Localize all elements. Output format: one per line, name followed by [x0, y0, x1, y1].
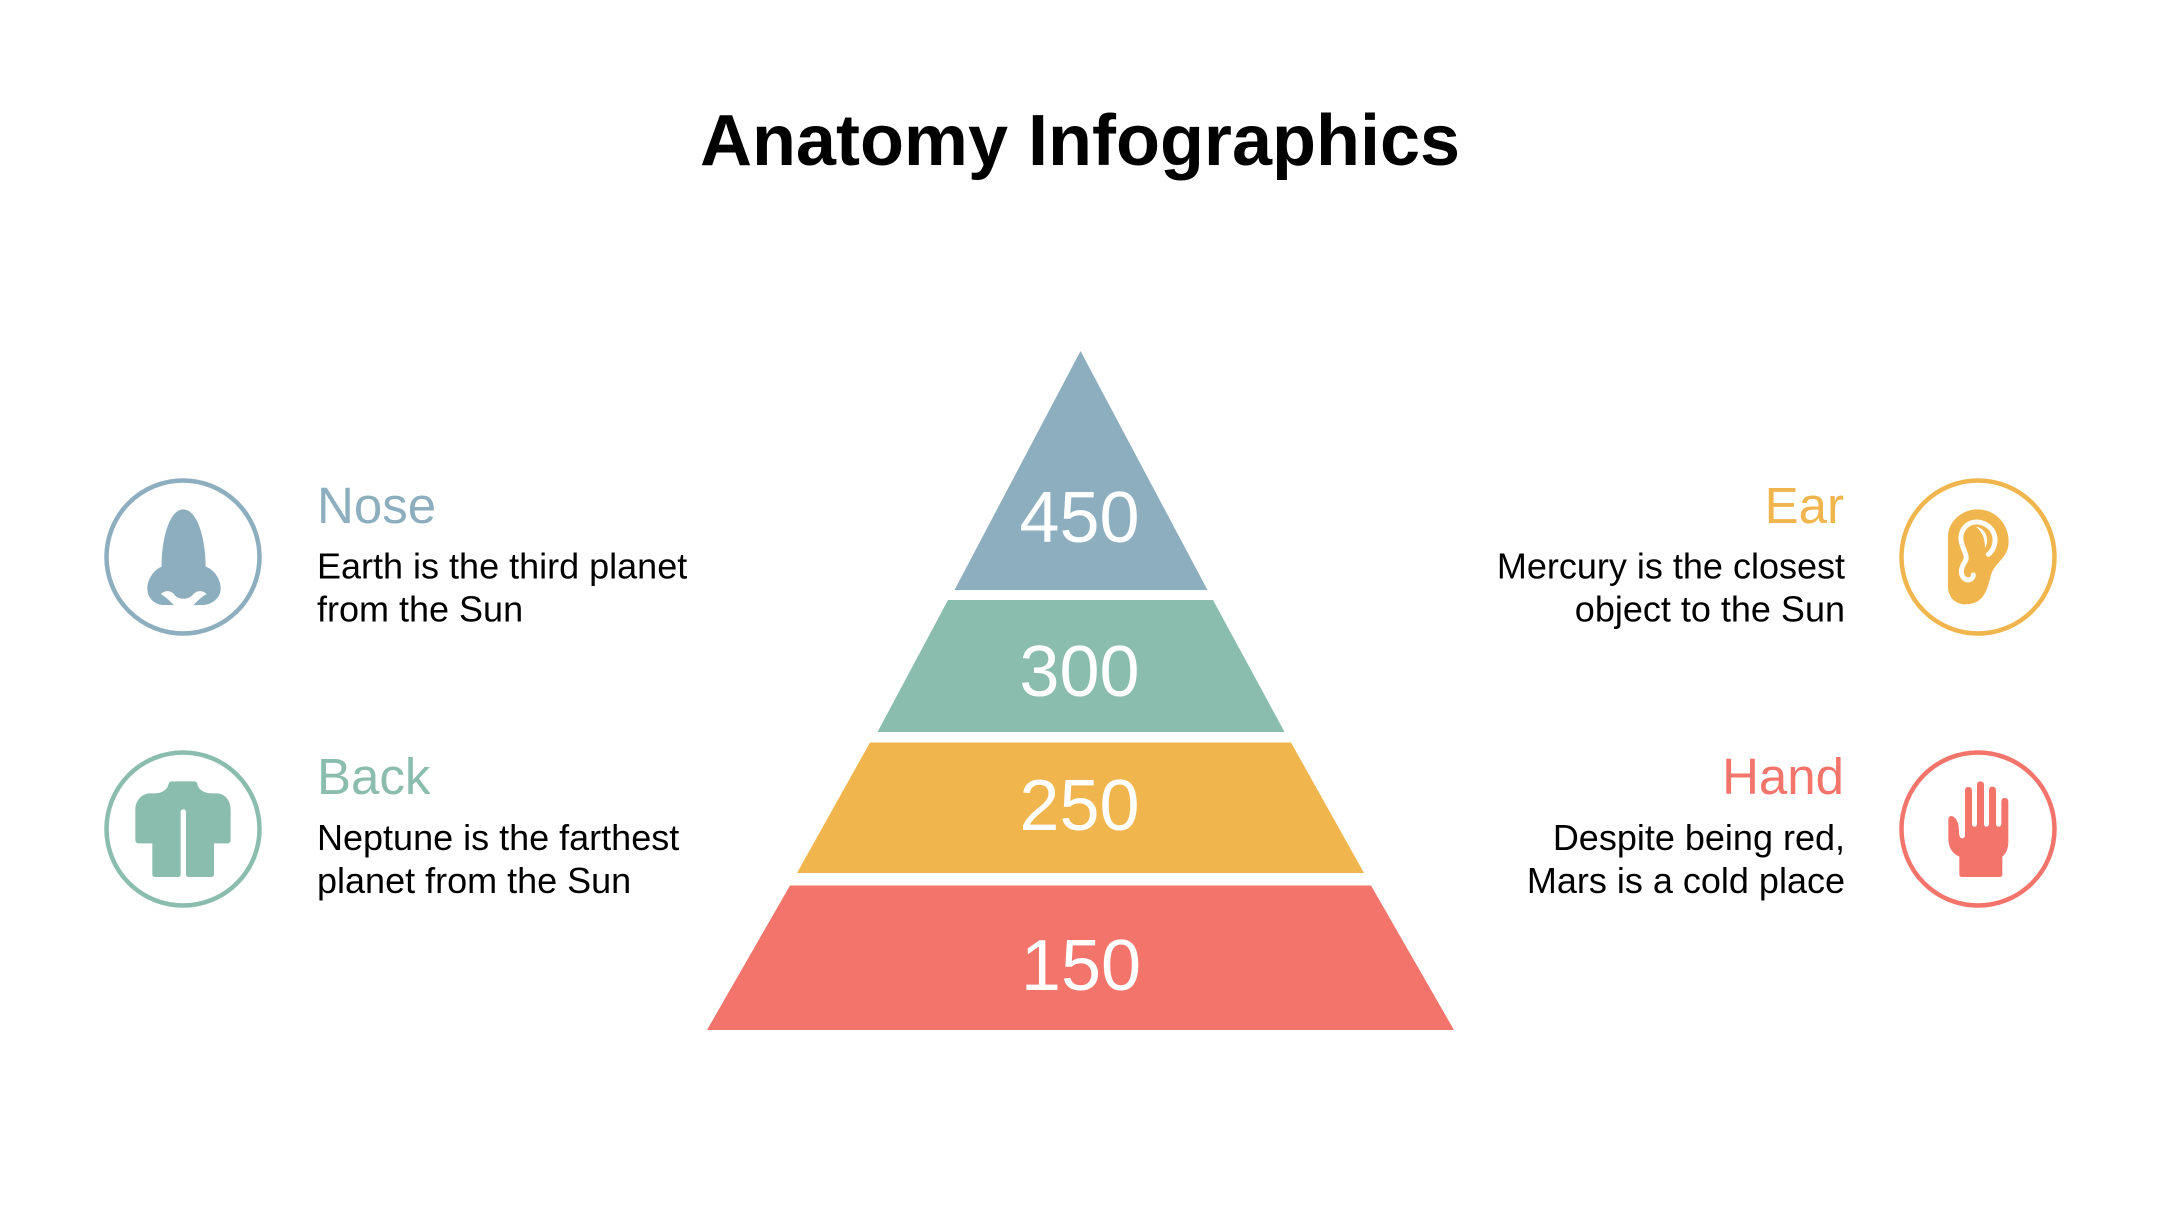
- heading: nose: Nose: [317, 477, 436, 534]
- icon: ear: [1902, 480, 2054, 634]
- pyramid tier: 300: [878, 600, 1285, 732]
- description: ear: object to the Sun: [1575, 588, 1845, 630]
- heading: ear: Ear: [1765, 477, 1844, 534]
- pyramid tier: 450: [954, 351, 1208, 590]
- pyramid tier: 300: 300: [1019, 632, 1140, 712]
- description: hand: Mars is a cold place: [1527, 860, 1845, 901]
- pyramid tier: 150: 150: [1021, 926, 1141, 1006]
- pyramid tier: 250: [797, 742, 1364, 873]
- title: Anatomy Infographics: [700, 101, 1460, 181]
- icon: nose: [106, 480, 260, 634]
- icon: back: [106, 752, 260, 906]
- icon: hand: [1902, 752, 2054, 906]
- description: back: Neptune is the farthest: [317, 817, 679, 858]
- pyramid tier: 150: [707, 886, 1454, 1030]
- panel: nose: [106, 477, 687, 634]
- panel: ear: [1497, 477, 2054, 634]
- description: hand: Despite being red,: [1553, 817, 1845, 858]
- description: ear: Mercury is the closest: [1497, 546, 1845, 586]
- description: nose: Earth is the third planet: [317, 546, 687, 586]
- description: back: planet from the Sun: [317, 860, 631, 901]
- pyramid tier: 450: 450: [1019, 478, 1140, 558]
- heading: back: Back: [317, 748, 431, 805]
- pyramid tier: 250: 250: [1019, 766, 1140, 846]
- pyramid chart: [707, 351, 1454, 1030]
- panel: back: [106, 748, 679, 906]
- heading: hand: Hand: [1722, 748, 1844, 805]
- description: nose: from the Sun: [317, 588, 523, 630]
- panel: hand: [1527, 748, 2054, 906]
